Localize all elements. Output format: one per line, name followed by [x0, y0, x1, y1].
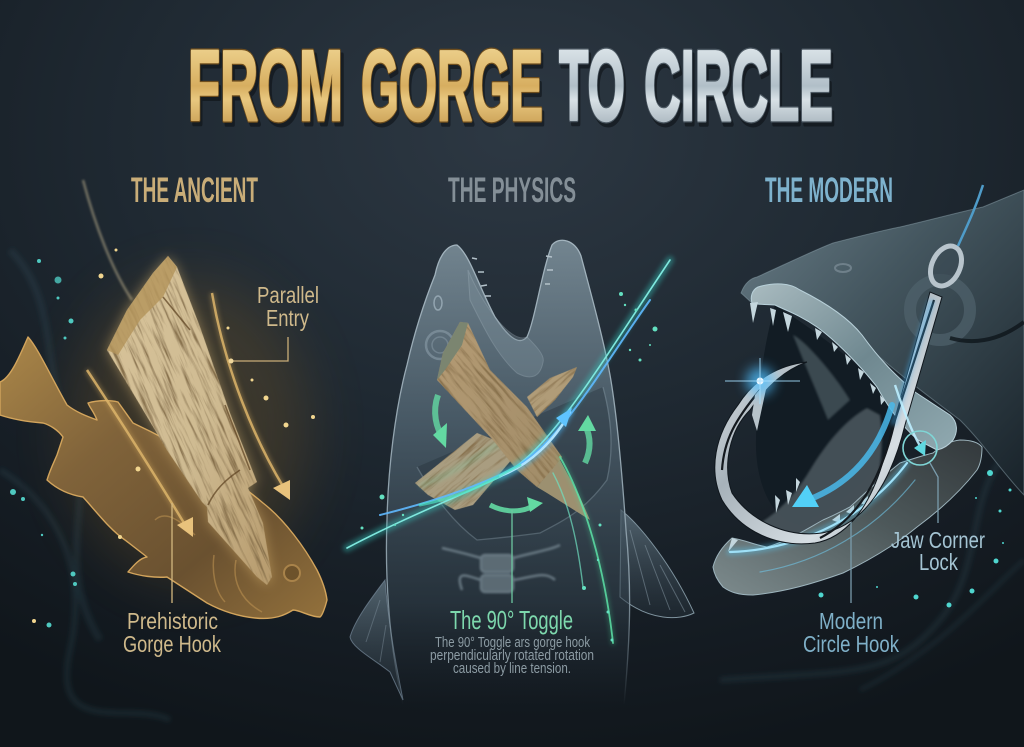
fishing line [958, 185, 983, 246]
spine and ribs [442, 545, 560, 592]
callout: parallel entry: Entry [266, 305, 309, 331]
title words: silver [559, 30, 835, 146]
arrow: rotation path [792, 405, 892, 507]
title words: silver: CIRCLE [644, 30, 833, 142]
icon: circle hook [715, 241, 968, 544]
heading: the ancient: THE ANCIENT [131, 171, 258, 210]
teeth [728, 302, 885, 552]
tongue [468, 270, 543, 377]
title words: silver: CIRCLE [646, 34, 835, 146]
panel: the ancient [0, 171, 394, 657]
title: GORGE [361, 30, 543, 142]
particles: teal [360, 292, 658, 642]
callout: jaw corner lock: Jaw Corner [891, 527, 985, 553]
body [386, 240, 630, 705]
title words: gold: FROM [190, 34, 346, 146]
callout: prehistoric gorge hook [123, 503, 221, 657]
icon: crossed gorge hook sticks [345, 260, 647, 590]
panel: the physics [345, 171, 694, 705]
callout: modern circle hook: Circle Hook [803, 631, 899, 657]
text block: toggle description: perpendicularly rotated rotation [430, 648, 594, 664]
icon: predator fish head [713, 190, 1024, 595]
title words: silver: CIRCLE [644, 30, 833, 142]
rotation arrows [433, 395, 596, 512]
title words: silver: TO [561, 34, 627, 146]
jaw corner glow line [895, 385, 920, 446]
mouth interior [756, 305, 897, 525]
title: GORGE [363, 34, 545, 146]
background wisps [0, 250, 1024, 720]
hook eye [924, 241, 968, 291]
amber glow [70, 280, 310, 580]
icon: translucent fish x-ray [350, 240, 694, 705]
panel: the modern [713, 171, 1024, 657]
heading: the modern: THE MODERN [765, 171, 893, 210]
callout: parallel entry: Parallel [257, 282, 319, 308]
arrow: parallel entry right [212, 293, 290, 500]
title words: gold: FROM [188, 30, 343, 142]
left fin [350, 580, 403, 700]
particles: teal [818, 470, 1012, 608]
gill disc [835, 264, 1024, 341]
particles: gold and teal [10, 248, 315, 628]
tongue [762, 408, 882, 545]
belly [417, 387, 611, 540]
callout: parallel entry [228, 282, 319, 364]
callout: prehistoric gorge hook: Prehistoric [127, 608, 218, 634]
text block: toggle description [430, 635, 594, 677]
title: GORGE [361, 30, 543, 142]
callout: modern circle hook: Modern [819, 608, 883, 634]
callout: jaw corner lock: Lock [919, 549, 958, 575]
arrow: parallel entry left [87, 370, 193, 537]
title [188, 30, 835, 146]
icon: bone gorge hook [0, 195, 394, 646]
palate [793, 335, 850, 420]
title words: silver: TO [559, 30, 625, 142]
hook barb [752, 380, 768, 431]
energy swooshes [347, 260, 670, 643]
shank glow [893, 300, 932, 425]
icon: golden fish [0, 337, 327, 618]
title words: silver: TO [559, 30, 625, 142]
jaw glow lines [730, 463, 915, 572]
upper jaw [751, 284, 956, 450]
hook glint [725, 358, 800, 404]
faint fishing line [83, 180, 132, 300]
text block: toggle description: caused by line tension. [453, 661, 571, 677]
text block: toggle description: The 90° Toggle ars gorge hook [435, 635, 591, 651]
callout: modern circle hook [803, 522, 899, 657]
callout: the 90 degree toggle [450, 510, 573, 635]
callout: the 90 degree toggle: The 90° Toggle [450, 605, 573, 635]
callout: jaw corner lock [891, 431, 985, 575]
lower jaw [713, 440, 982, 595]
title words: gold: FROM [188, 30, 343, 142]
heading: the physics: THE PHYSICS [448, 171, 576, 210]
callout: prehistoric gorge hook: Gorge Hook [123, 631, 221, 657]
right fin [620, 510, 694, 618]
